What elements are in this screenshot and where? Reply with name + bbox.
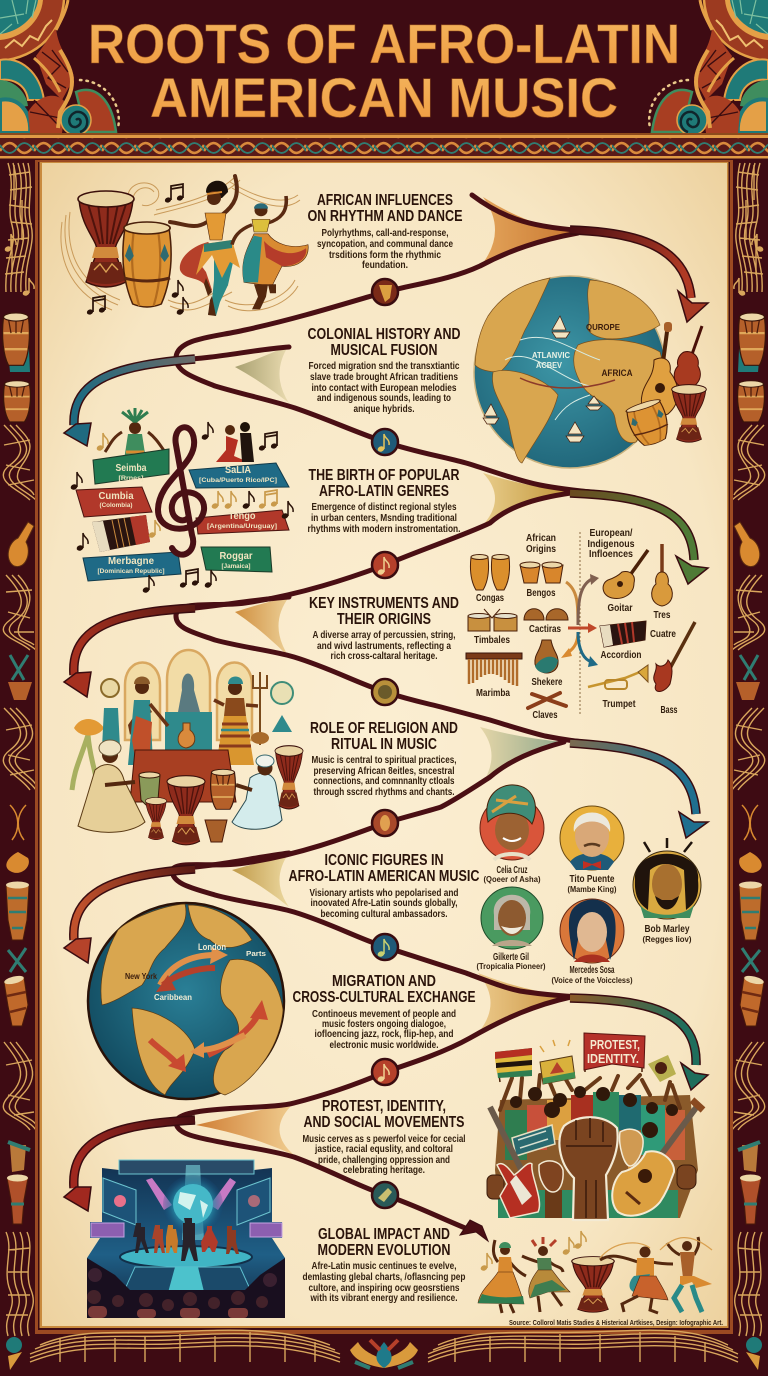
text block 5 xyxy=(310,720,458,798)
dancer second xyxy=(522,1237,570,1312)
banner: Samba: [Rrnes] xyxy=(118,475,144,482)
banner: Reggae xyxy=(201,547,272,572)
text block 5: RITUAL IN MUSIC xyxy=(331,736,437,753)
icon: congas: Congas xyxy=(476,592,504,604)
label: European Indigenous Influences: Indigenous xyxy=(588,538,635,550)
text block 1: trsditions form the rhythmic xyxy=(329,250,441,261)
icon: djembe on map xyxy=(672,385,706,442)
text block 1: AFRICAN INFLUENCES xyxy=(317,192,453,209)
label: African Origins: Origins xyxy=(526,543,556,555)
icon: guitar: Goitar xyxy=(608,602,632,614)
icon: claves: Claves xyxy=(532,709,558,721)
banner: Merengue xyxy=(83,552,181,581)
text block 2: COLONIAL HISTORY AND xyxy=(308,326,460,343)
text block 2: anique hybrids. xyxy=(354,404,415,415)
label: European Indigenous Influences: Infloences xyxy=(589,548,633,560)
banner: Salsa: SaLIA xyxy=(225,465,251,476)
portrait: Mercedes Sosa: (Voice of the Voiccless) xyxy=(552,975,633,985)
text block 4: THEIR ORIGINS xyxy=(337,611,431,628)
text block 4: rich cross-caltaral heritage. xyxy=(330,651,438,662)
icon: congas xyxy=(470,554,510,604)
kneeling woman left xyxy=(78,740,145,832)
sign: placard xyxy=(540,1040,575,1084)
label: African Origins: African xyxy=(526,532,556,544)
text block 7: music fosters ongoing dialogoe, xyxy=(322,1019,446,1030)
portrait: Tito Puente: (Mambe King) xyxy=(568,884,617,894)
text block 7 xyxy=(292,973,476,1051)
text block 5: Music is central to spiritual practices, xyxy=(312,755,457,766)
icon: trident and right emblem xyxy=(251,672,293,745)
text block 6: ICONIC FIGURES IN xyxy=(324,852,444,869)
node: green globe xyxy=(372,1182,398,1208)
illustration: closing dancers and drum xyxy=(478,1231,712,1313)
text block 9: demlasting glebal charts, /oflasncing pep xyxy=(302,1272,466,1283)
banner: Tango: [Argentina/Uruguay] xyxy=(207,523,277,530)
banner: Tango: Tengo xyxy=(228,511,256,522)
text block 2: MUSICAL FUSION xyxy=(330,342,438,359)
text block 1 xyxy=(308,192,462,271)
pink spotlights xyxy=(146,1178,236,1210)
glowing globe xyxy=(163,1165,223,1240)
arrow 2 xyxy=(64,359,195,446)
banner: Samba xyxy=(93,449,169,484)
altar cloth xyxy=(165,712,212,750)
icon: accordion: Accordion xyxy=(600,649,642,661)
icon: marimba xyxy=(466,653,522,699)
dancer third xyxy=(600,1246,673,1313)
staff swirl xyxy=(61,176,300,311)
text block 6: becoming cultural ambassadors. xyxy=(320,909,448,920)
text block 5: connections, and comnnanlty ctloals xyxy=(314,776,455,787)
text block 9 xyxy=(302,1226,466,1304)
portrait: Celia Cruz xyxy=(480,785,544,884)
banner: Cumbia: Cumbia xyxy=(98,491,134,502)
text block 1: Polyrhythms, call-and-response, xyxy=(322,228,449,239)
text block 1: feundation. xyxy=(362,260,408,271)
standing woman left xyxy=(128,676,168,765)
sign: slogan board xyxy=(512,1125,555,1156)
icon: claves xyxy=(528,693,566,721)
corner teal left xyxy=(6,1337,22,1370)
text block 4: A diverse array of percussien, string, xyxy=(312,630,456,641)
header banner xyxy=(0,0,768,135)
far fists xyxy=(487,1165,696,1199)
icon: violin xyxy=(674,326,702,388)
text block 9: with its vibrant energy and resilience. xyxy=(310,1293,458,1304)
ships xyxy=(483,316,602,442)
title: ROOTS OF AFRO-LATIN xyxy=(88,12,680,75)
icon: djembe drum xyxy=(78,191,134,287)
altar jar xyxy=(178,723,195,748)
icon: carnival dancer xyxy=(105,408,165,460)
text block 2: Forced migration snd the transxtiantic xyxy=(308,361,460,372)
banner: protest identity: PROTEST, xyxy=(590,1038,640,1052)
portrait: Mercedes Sosa: Mercedes Sosa xyxy=(570,964,615,976)
node: blue double note xyxy=(372,934,398,960)
standing woman right xyxy=(214,676,258,765)
text block 2: and indigenous sounds, leading to xyxy=(317,393,451,404)
control deck xyxy=(120,1267,255,1300)
corner teal right xyxy=(746,1337,762,1370)
sign: flag xyxy=(495,1048,532,1082)
text block 2: into contact with European melodies xyxy=(312,383,457,394)
music notes xyxy=(70,422,293,594)
parchment panel xyxy=(35,160,733,1334)
icon: orange flower xyxy=(72,719,104,790)
text block 3: AFRO-LATIN GENRES xyxy=(319,483,449,500)
globe map xyxy=(474,276,666,468)
sign: right emblem xyxy=(648,1055,676,1082)
portrait: Tito Puente: Tito Puente xyxy=(570,873,615,885)
text block 2 xyxy=(308,326,460,415)
label: European Indigenous Influences xyxy=(588,527,635,560)
portrait: Bob Marley: Bob Marley xyxy=(644,923,690,935)
banner: Salsa xyxy=(189,463,289,488)
banner: protest identity xyxy=(584,1033,645,1072)
arrow 8 xyxy=(64,1120,195,1211)
text block 5: through sscred rhythms and chants. xyxy=(314,787,455,798)
node: mask xyxy=(372,810,398,836)
text block 1: ON RHYTHM AND DANCE xyxy=(308,208,462,225)
text block 2: slave trade brought African traditiens xyxy=(310,372,458,383)
banner: Reggae: [Jamaica] xyxy=(222,563,250,570)
dancer one xyxy=(170,176,240,316)
portrait: Celia Cruz: (Qoeer of Asha) xyxy=(484,874,541,884)
central hands motif xyxy=(350,1340,418,1368)
side screens xyxy=(103,1178,270,1225)
text block 9: MODERN EVOLUTION xyxy=(318,1242,450,1259)
arrow 4 xyxy=(64,608,195,697)
text block 8: pride, challenging oppression and xyxy=(318,1155,450,1166)
icon: acoustic guitar xyxy=(612,1100,703,1216)
portrait: Tito Puente xyxy=(560,806,624,894)
icon: electric guitar xyxy=(490,1107,540,1218)
header ornament: right corner xyxy=(649,0,768,135)
illustration: world globe: Parts xyxy=(246,949,266,958)
header ornament: left corner xyxy=(0,0,119,135)
icon: bongos xyxy=(520,562,563,599)
icon: guitar xyxy=(603,550,648,614)
icon: timbales: Timbales xyxy=(474,634,510,646)
altar statue xyxy=(178,674,200,712)
node: gold pattern xyxy=(372,679,398,705)
stage platform xyxy=(120,1246,252,1268)
icon: cactiras shells: Cactiras xyxy=(529,623,561,635)
title xyxy=(88,12,680,129)
fist orange xyxy=(620,1129,643,1195)
portrait: Mercedes Sosa xyxy=(552,899,633,985)
fan decorations xyxy=(196,197,578,1155)
icon: shekere: Shekere xyxy=(532,676,563,688)
portrait: Gilberto Gil: (Tropicalia Pioneer) xyxy=(476,961,546,971)
altar table xyxy=(130,750,236,802)
text block 8: jastice, racial equslity, and coltoral xyxy=(314,1144,453,1155)
illustration: religious ritual xyxy=(72,650,303,845)
node: red note xyxy=(372,552,398,578)
music notes xyxy=(86,184,188,316)
icon: left emblem xyxy=(101,679,120,748)
icon: conga drum xyxy=(123,222,171,307)
portrait: Bob Marley xyxy=(633,838,701,944)
icon: centre djembe xyxy=(572,1257,614,1312)
illustration: protest crowd xyxy=(487,1033,703,1220)
text block 8: AND SOCIAL MOVEMENTS xyxy=(304,1114,464,1131)
stage truss xyxy=(119,1160,254,1174)
globe map: ACBEV xyxy=(536,360,562,370)
icon: tres xyxy=(652,544,672,621)
text block 8: PROTEST, IDENTITY, xyxy=(322,1098,446,1115)
text block 6: Visionary artists who pepolarised and xyxy=(310,888,458,899)
icon: bongos: Bengos xyxy=(526,587,556,599)
arrow 6 xyxy=(64,869,195,963)
dancer fourth xyxy=(667,1237,712,1312)
globe map: QUROPE xyxy=(586,322,620,332)
banner: Tango xyxy=(196,510,289,534)
text block 3: Emergence of distinct regional styles xyxy=(312,502,457,513)
node: Africa emblem xyxy=(372,279,398,305)
icon: shekere xyxy=(532,640,563,688)
text block 9: Afre-Latin music centinues te evelve, xyxy=(312,1261,457,1272)
left side border ornaments xyxy=(3,163,36,1336)
banner: Cumbia xyxy=(76,487,152,517)
illustration: futuristic concert stage xyxy=(87,1160,285,1318)
banner: Merengue: Merbagne xyxy=(108,556,154,567)
icon: marimba: Marimba xyxy=(476,687,510,699)
icon: accordion xyxy=(92,515,150,552)
icon: couple dancing xyxy=(216,422,254,462)
audience xyxy=(87,1258,285,1318)
performer signs xyxy=(91,1223,282,1237)
header woven wave band xyxy=(0,133,768,162)
right side border ornaments xyxy=(732,163,765,1336)
text block 4 xyxy=(309,595,459,662)
banner: Reggae: Roggar xyxy=(220,551,253,562)
globe map: AFRICA xyxy=(602,368,633,379)
shrine arches xyxy=(125,650,252,740)
text block 4: KEY INSTRUMENTS AND xyxy=(309,595,459,612)
scarves and notes xyxy=(600,1238,712,1258)
portrait: Bob Marley: (Regges Iiov) xyxy=(642,934,692,944)
icon: bass guitar: Bass xyxy=(660,704,678,716)
origin arrows xyxy=(561,574,599,667)
fist second xyxy=(539,1161,563,1218)
crowd mass xyxy=(495,1075,698,1218)
flow: curved ribbon connectors xyxy=(64,195,708,1241)
label: European Indigenous Influences: European/ xyxy=(590,527,633,539)
text block 7: MIGRATION AND xyxy=(332,973,436,990)
banner: protest identity: IDENTITY. xyxy=(587,1052,639,1066)
text block 3: rhythms with modern instromentation. xyxy=(308,524,461,535)
text block 7: CROSS-CULTURAL EXCHANGE xyxy=(292,989,476,1006)
illustration: drums and dancers xyxy=(61,176,308,316)
arrow 1 xyxy=(570,230,708,322)
icon: guitar xyxy=(641,322,678,416)
illustration: genre banners xyxy=(70,408,293,594)
illustration: instrument chart xyxy=(466,527,695,721)
gold notes xyxy=(96,433,278,539)
globe map: ATLANVIC xyxy=(532,350,570,360)
illustration: world globe xyxy=(88,903,284,1099)
arrow 9 xyxy=(460,1220,488,1241)
text block 7: electronic music worldwide. xyxy=(330,1040,439,1051)
dashed divider xyxy=(579,532,581,716)
arrow 3 xyxy=(570,493,708,584)
portrait: Celia Cruz: Celia Cruz xyxy=(496,864,528,876)
kneeling woman right xyxy=(232,755,282,829)
illustration: world globe: Caribbean xyxy=(154,992,192,1002)
dark S-curve ribbons xyxy=(172,195,600,1230)
text block 3 xyxy=(308,467,461,535)
performers xyxy=(133,1218,239,1261)
icon: bass guitar xyxy=(654,622,695,716)
icon: trumpet: Trumpet xyxy=(602,698,636,710)
text block 5: preserving African 8eitles, sncestral xyxy=(314,766,455,777)
text block 8: Music cerves as s pewerfol veice for cecial xyxy=(302,1134,466,1145)
icon: cactiras shells xyxy=(524,609,568,635)
text block 9: cultore, and inspiring ocw geosrstiens xyxy=(308,1283,460,1294)
icon: treble clef xyxy=(158,427,204,555)
illustration: world globe: New York xyxy=(125,971,157,981)
node: blue note xyxy=(372,429,398,455)
text block 7: iofloencing jazz, rock, flip-hep, and xyxy=(314,1029,454,1040)
illustration: world globe: London xyxy=(198,942,226,952)
icon: trumpet xyxy=(588,665,648,710)
text block 5: ROLE OF RELIGION AND xyxy=(310,720,458,737)
title: AMERICAN MUSIC xyxy=(150,66,618,129)
arrow 5 xyxy=(570,743,708,838)
label: Cuatre: Cuatre xyxy=(650,628,676,640)
icon: conga on map xyxy=(624,397,673,449)
arrow 7 xyxy=(570,998,708,1090)
text block 8 xyxy=(302,1098,466,1176)
text block 6: AFRO-LATIN AMERICAN MUSIC xyxy=(288,868,480,885)
text block 8: celebrating heritage. xyxy=(343,1165,425,1176)
icon: raised fist xyxy=(559,1117,618,1220)
dancer two xyxy=(232,196,308,309)
icon: accordion xyxy=(600,621,646,661)
illustration: Atlantic map with instruments xyxy=(474,276,706,468)
dancer left xyxy=(478,1240,526,1313)
text block 1: syncopation, and communal dance xyxy=(317,239,453,250)
banner: Cumbia: (Colombia) xyxy=(100,502,132,509)
text block 7: Continoeus mevement of people and xyxy=(312,1009,456,1020)
text block 9: GLOBAL IMPACT AND xyxy=(318,1226,450,1243)
icon: timbales xyxy=(468,609,517,646)
text block 3: THE BIRTH OF POPULAR xyxy=(308,467,460,484)
banner: Salsa: [Cuba/Puerto Rico/IPC] xyxy=(199,477,277,484)
text block 4: and wivd lastruments, reflecting a xyxy=(317,641,451,652)
ritual drums xyxy=(139,746,303,845)
banner: Samba: Seimba xyxy=(116,463,147,474)
portrait: Gilberto Gil: Gilkerte Gil xyxy=(493,951,529,963)
icon: tres: Tres xyxy=(654,609,671,621)
text block 3: in urban centers, Msnding traditional xyxy=(311,513,457,524)
text block 6: inoovated Afre-Latin sounds globally, xyxy=(310,898,458,909)
bottom music staff band xyxy=(6,1330,762,1370)
banner: Merengue: [Dominican Republic] xyxy=(98,568,164,575)
exchange arrows xyxy=(150,947,268,1072)
label: African Origins xyxy=(526,532,556,555)
text block 6 xyxy=(288,852,480,920)
portrait: Gilberto Gil xyxy=(476,887,546,971)
node: red note two xyxy=(372,1059,398,1085)
